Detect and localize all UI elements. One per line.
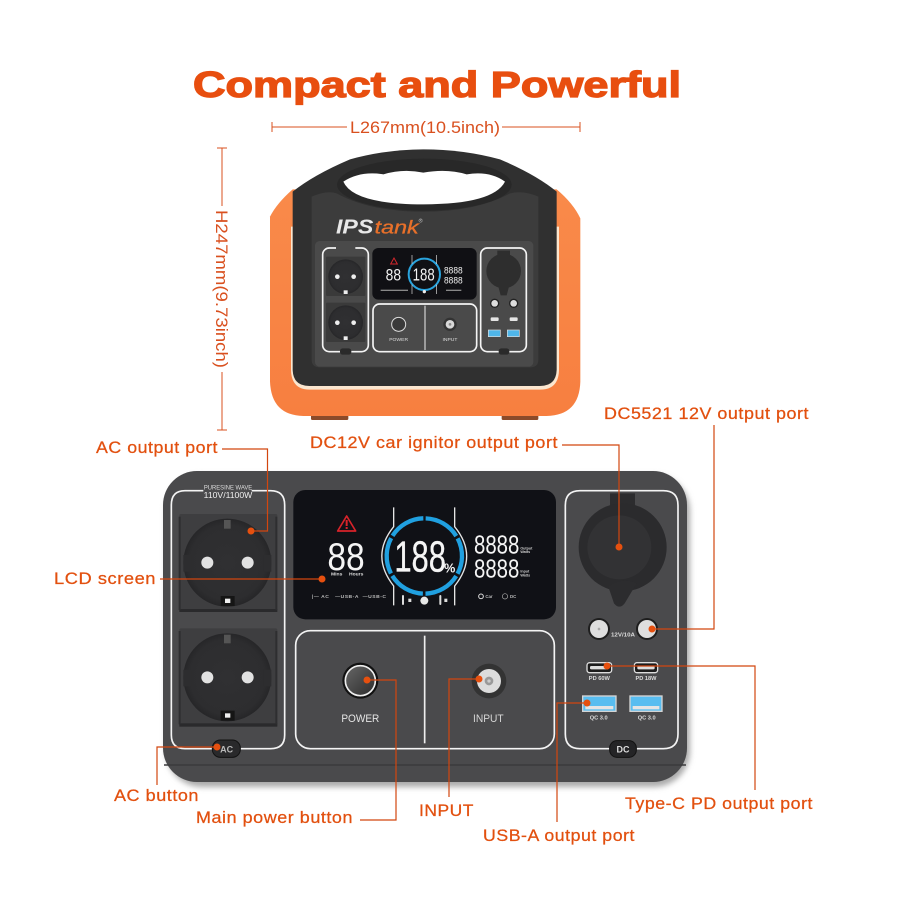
orange shell: [270, 189, 580, 416]
AC socket bay: [171, 484, 285, 757]
DC5521 ports: 12V/10A: [611, 633, 635, 639]
LCD: 8888: [444, 275, 463, 285]
power and input bay: [373, 304, 477, 352]
power button: [341, 663, 380, 725]
logo: [336, 216, 423, 238]
status icons: DC: [510, 594, 516, 599]
LCD screen: Mins: [331, 572, 343, 578]
output legend: |— AC —USB-A —USB-C: [312, 594, 386, 600]
callout: USB-A output port: USB-A output port: [483, 827, 635, 845]
DC5521 ports: [588, 618, 658, 640]
USB-A ports: QC 3.0: [638, 715, 656, 721]
AC button: [212, 740, 240, 757]
power and input bay: POWER: [389, 337, 408, 343]
handle: [337, 159, 512, 211]
LCD screen: [293, 490, 556, 619]
DC bay: [565, 491, 678, 757]
LCD screen: %: [444, 562, 455, 576]
product panel: enlarged front view: [163, 471, 690, 787]
USB-A ports: [583, 696, 662, 721]
dark body: [293, 149, 557, 386]
Type-C ports: PD 60W: [589, 676, 611, 682]
battery ring: [382, 507, 467, 605]
callout: INPUT: INPUT: [419, 802, 474, 820]
callout: DC5521 12V output port: DC5521 12V output port: [604, 405, 809, 423]
callout: AC button: AC button: [114, 787, 199, 805]
callout: USB-A output port: [483, 700, 635, 845]
Type-C ports: PD 18W: [635, 676, 657, 682]
logo: ®: [419, 218, 423, 225]
panel shadow: [166, 475, 690, 787]
callout: AC output port: [96, 439, 268, 534]
power and input bay: [296, 631, 554, 749]
input port: INPUT: [473, 713, 504, 725]
socket 2: [179, 628, 277, 727]
USB-A ports: QC 3.0: [590, 715, 608, 721]
LCD screen: Output: [520, 546, 533, 550]
power and input bay: INPUT: [443, 337, 457, 343]
status icons: Car: [485, 594, 493, 599]
title: Compact and Powerful: [193, 64, 681, 105]
inner grey fascia: [312, 192, 538, 367]
LCD screen: Hours: [349, 572, 364, 578]
power button: POWER: [341, 713, 380, 725]
AC button: AC: [220, 744, 234, 754]
panel marking: PURESINE WAVE: [204, 484, 252, 491]
callout: INPUT: [419, 676, 482, 820]
LCD: 188: [413, 265, 435, 285]
width dimension: L267mm(10.5inch): [350, 118, 500, 137]
callout: Main power button: [196, 676, 396, 827]
warning icon: [338, 516, 356, 531]
socket 1: [179, 514, 277, 612]
power digits: 8888: [474, 529, 519, 559]
panel face: [163, 471, 687, 782]
callout: Type-C PD output port: Type-C PD output port: [625, 795, 813, 813]
LCD screen: Watts: [520, 550, 530, 554]
feet: [311, 413, 538, 420]
callout: Main power button: Main power button: [196, 809, 353, 827]
callout: DC12V car ignitor output port: [310, 434, 622, 550]
cream trim: [291, 227, 559, 390]
Type-C ports: [587, 663, 658, 682]
status icons: [402, 594, 516, 605]
LCD screen: 8888: [474, 553, 519, 583]
AC socket bay: [323, 246, 368, 355]
product photo: small power station: [270, 149, 580, 420]
time digits: 88: [327, 535, 365, 579]
callout: LCD screen: LCD screen: [54, 570, 156, 588]
battery percent: 188: [394, 534, 446, 582]
logo: IPS: [336, 216, 374, 238]
logo: tank: [375, 216, 421, 237]
car ignitor socket: [579, 493, 667, 607]
LCD: [372, 248, 477, 300]
callout: DC12V car ignitor output port: DC12V car ignitor output port: [310, 434, 558, 452]
callout: Type-C PD output port: [604, 662, 813, 813]
LCD: 88: [386, 266, 401, 285]
DC button: [610, 741, 636, 757]
callout: LCD screen: [54, 570, 326, 588]
LCD: 8888: [444, 265, 463, 275]
DC bay: [481, 248, 526, 355]
LCD screen: Watts: [520, 573, 530, 577]
DC button: DC: [617, 745, 630, 755]
callout: AC output port: AC output port: [96, 439, 218, 457]
height dimension: H247mm(9.73inch): [212, 210, 231, 368]
callout: DC5521 12V output port: [604, 405, 809, 632]
front panel: [315, 241, 533, 367]
LCD screen: Input: [520, 570, 530, 574]
input port: [472, 664, 506, 725]
AC socket bay: 110V/1100W: [204, 490, 253, 500]
callout: AC button: [114, 744, 220, 805]
